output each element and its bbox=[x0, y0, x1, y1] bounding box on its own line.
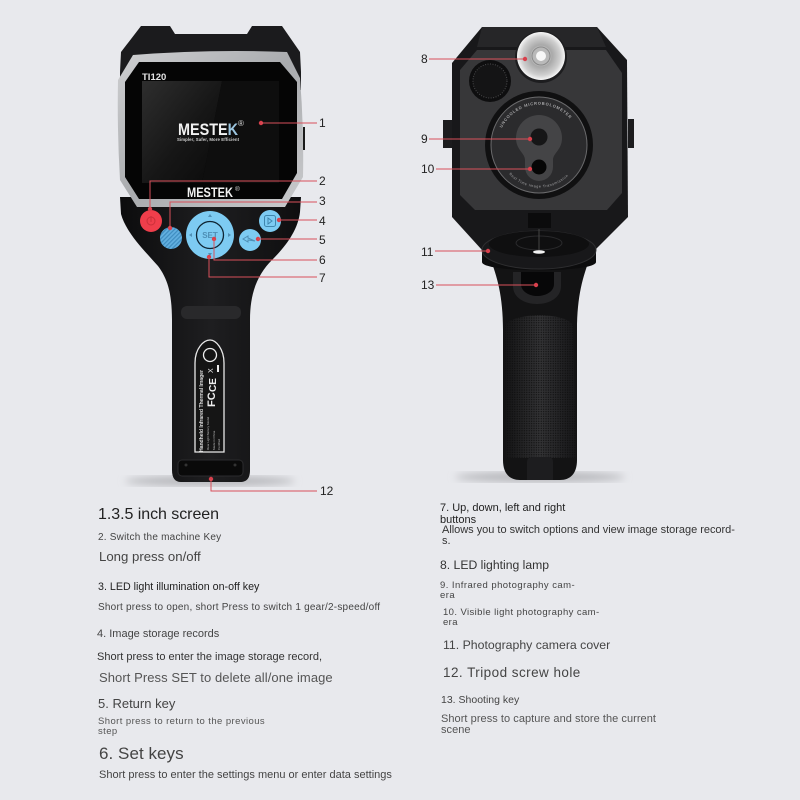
top bumper bbox=[120, 26, 301, 90]
rating label: Handheld Infrared Thermal Imager bbox=[199, 370, 205, 452]
item 7 heading bbox=[440, 502, 566, 526]
side keys bbox=[443, 119, 634, 148]
rating label: Rear Light Battery Model bbox=[206, 416, 210, 450]
rear body bbox=[452, 27, 628, 250]
item 5 body bbox=[98, 716, 265, 737]
storage cap bbox=[469, 60, 511, 102]
callout 2 bbox=[148, 174, 326, 211]
callout 4: 4 bbox=[319, 214, 326, 228]
item 2 heading: 2. Switch the machine Key bbox=[98, 532, 221, 543]
device: front view bbox=[118, 26, 305, 486]
LED lamp bbox=[515, 31, 567, 83]
item 10 bbox=[443, 607, 600, 628]
item 9: 9. Infrared photography cam- bbox=[440, 580, 575, 591]
text block: feature list right bbox=[440, 502, 735, 736]
item 10: 10. Visible light photography cam- bbox=[443, 607, 600, 618]
text block: feature list left bbox=[97, 506, 392, 781]
callout 2: 2 bbox=[319, 174, 326, 188]
item 4 body line 2: Short Press SET to delete all/one image bbox=[99, 670, 333, 685]
floor shadow bbox=[455, 472, 625, 482]
callout 3: 3 bbox=[319, 194, 326, 208]
silver screen frame bbox=[118, 51, 303, 207]
screen display bbox=[142, 81, 222, 183]
callout 7 bbox=[207, 255, 326, 285]
callout 10: 10 bbox=[421, 162, 435, 176]
callout 11: 11 bbox=[421, 245, 434, 259]
item 8 heading: 8. LED lighting lamp bbox=[440, 558, 549, 572]
rear plate bbox=[460, 50, 622, 210]
shooting key bbox=[513, 272, 561, 304]
callout 9: 9 bbox=[421, 132, 428, 146]
item 1 heading: 1.3.5 inch screen bbox=[98, 506, 219, 523]
playback button bbox=[259, 210, 281, 232]
grip band bbox=[181, 306, 241, 319]
direction pad bbox=[186, 211, 234, 259]
rating label: Certified bbox=[217, 438, 221, 450]
screen logo: Simpler, Safer, More Efficient bbox=[177, 137, 240, 142]
item 13 heading: 13. Shooting key bbox=[441, 694, 519, 706]
callout 4 bbox=[277, 214, 326, 228]
screen glass bbox=[125, 62, 297, 199]
bezel logo: MESTEK bbox=[187, 185, 233, 200]
callout 8 bbox=[421, 52, 527, 66]
hinge bbox=[528, 213, 551, 228]
callout 6 bbox=[212, 237, 326, 267]
screen logo: ® bbox=[238, 119, 244, 128]
item 7 heading: buttons bbox=[440, 514, 476, 526]
callout 13: 13 bbox=[421, 278, 435, 292]
item 12: 12. Tripod screw hole bbox=[443, 665, 581, 680]
item 10: era bbox=[443, 616, 458, 628]
base plate bbox=[527, 457, 553, 480]
callout 11 bbox=[421, 245, 490, 259]
handle and lower body bbox=[120, 197, 301, 482]
item 7 body bbox=[442, 524, 735, 547]
callout 12 bbox=[209, 477, 334, 498]
item 5 body: step bbox=[98, 726, 118, 737]
item 4 heading: 4. Image storage records bbox=[97, 628, 219, 640]
item 3 body: Short press to open, short Press to switch 1 gear/2-speed/off bbox=[98, 602, 380, 613]
item 13 body: Short press to capture and store the current bbox=[441, 713, 656, 725]
callout 8: 8 bbox=[421, 52, 428, 66]
leader lines: front view bbox=[148, 116, 334, 498]
callout 5 bbox=[256, 233, 326, 247]
rating label bbox=[195, 340, 224, 452]
item 9 bbox=[440, 580, 575, 600]
rating label: CE bbox=[208, 378, 219, 392]
item 5 heading: 5. Return key bbox=[98, 696, 175, 711]
camera cover bbox=[482, 229, 596, 270]
item 7 heading: 7. Up, down, left and right bbox=[440, 502, 565, 514]
item 3 heading: 3. LED light illumination on-off key bbox=[98, 581, 259, 593]
callout 3 bbox=[168, 194, 326, 230]
item 2 body: Long press on/off bbox=[99, 549, 201, 564]
callout 5: 5 bbox=[319, 233, 326, 247]
callout 1: 1 bbox=[319, 116, 326, 130]
textured grip bbox=[505, 315, 576, 458]
leader lines: rear view bbox=[421, 52, 538, 292]
bezel logo: ® bbox=[235, 185, 240, 193]
item 13 body bbox=[441, 713, 656, 736]
rating label: FC bbox=[206, 392, 218, 407]
rating label: X bbox=[208, 368, 215, 373]
grip handle bbox=[490, 258, 590, 480]
screen logo: MESTEK bbox=[178, 120, 239, 139]
side key bbox=[303, 127, 305, 150]
item 6 body: Short press to enter the settings menu or enter data settings bbox=[99, 769, 392, 781]
item 13 body: scene bbox=[441, 724, 471, 736]
callout 13 bbox=[421, 278, 538, 292]
callout 12: 12 bbox=[320, 484, 334, 498]
item 5 body: Short press to return to the previous bbox=[98, 716, 265, 727]
direction pad: SET bbox=[202, 231, 218, 240]
item 11: 11. Photography camera cover bbox=[443, 638, 610, 652]
item 4 body line 1: Short press to enter the image storage record, bbox=[97, 651, 322, 663]
item 9: era bbox=[440, 590, 455, 600]
lens assembly: Real Time Image Transmission bbox=[509, 172, 568, 188]
tripod plate bbox=[178, 460, 243, 476]
callout 9 bbox=[421, 132, 532, 146]
callout 10 bbox=[421, 162, 532, 176]
rating label: Made in China bbox=[212, 430, 216, 450]
lens assembly bbox=[485, 91, 593, 199]
lens assembly: UNCOOLED MICROBOLOMETER bbox=[500, 102, 572, 128]
item 6 heading: 6. Set keys bbox=[99, 744, 184, 763]
device: rear view bbox=[443, 27, 634, 483]
item 7 body: Allows you to switch options and view image storage record- bbox=[442, 524, 735, 536]
LED button bbox=[160, 227, 182, 249]
power button bbox=[140, 210, 162, 232]
item 7 body: s. bbox=[442, 535, 451, 547]
callout 6: 6 bbox=[319, 253, 326, 267]
floor shadow bbox=[125, 476, 295, 486]
return button bbox=[239, 229, 261, 251]
callout 1 bbox=[259, 116, 326, 130]
callout 7: 7 bbox=[319, 271, 326, 285]
model name: TI120 bbox=[142, 72, 166, 83]
